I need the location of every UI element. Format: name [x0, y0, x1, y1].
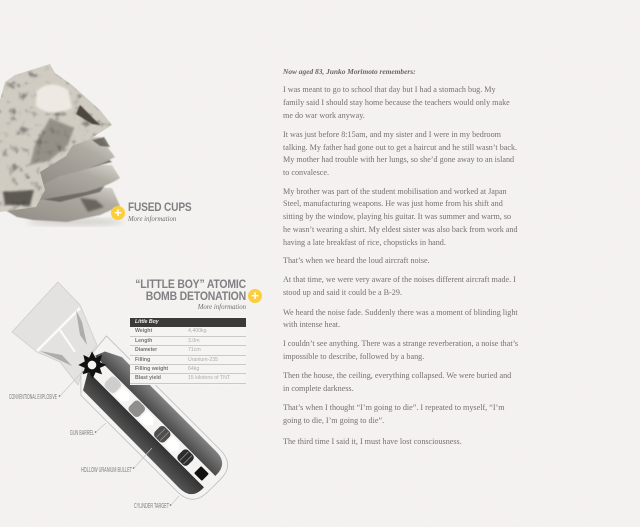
label: hollow uranium bullet: HOLLOW URANIUM BULLET: [81, 467, 132, 474]
text block: testimony: My brother was part of the student mobilisation and worked at Japan: [283, 187, 507, 196]
label: conventional explosive: CONVENTIONAL EXPLOSIVE: [9, 394, 57, 401]
text block: testimony: That’s when we heard the loud aircraft noise.: [283, 256, 430, 265]
text block: testimony: Then the house, the ceiling, everything collapsed. We were buried and: [283, 371, 511, 380]
bomb casing: [64, 336, 235, 507]
text block: testimony: to convalesce.: [283, 168, 329, 177]
table: little boy specifications: [130, 316, 246, 385]
text block: testimony: It was just before 8:15am, and my sister and I were in my bedroom: [283, 130, 501, 139]
table: little boy specifications: Weight: [135, 328, 152, 334]
icon: plus fused cups: +: [114, 205, 122, 220]
photo: fused cups: [0, 64, 121, 227]
text block: testimony: stood up and said it could be a B-29.: [283, 288, 402, 297]
text block: testimony: I couldn’t see anything. There was a strange reverberation, a noise that’s: [283, 339, 518, 348]
link: more information bomb: More information: [198, 304, 246, 311]
text block: testimony: My mother had trouble with her lungs, so she’d gone away to an island: [283, 155, 514, 164]
table: little boy specifications: Filling: [135, 357, 150, 363]
text block: testimony: going to die, I’m going to die”.: [283, 416, 384, 425]
text block: testimony: That’s when I thought “I’m going to die”. I repeated to myself, “I’m: [283, 403, 505, 412]
table: little boy specifications: 3.0m: [188, 338, 200, 344]
label: hollow uranium bullet: [81, 448, 152, 474]
label: gun barrel: [70, 423, 106, 437]
link: more information cups: More information: [128, 216, 176, 223]
text block: testimony: The third time I said it, I must have lost consciousness.: [283, 437, 462, 446]
label: gun barrel: GUN BARREL: [70, 430, 94, 437]
table: little boy specifications: 71cm: [188, 347, 201, 353]
label: conventional explosive: [9, 370, 84, 401]
text block: testimony: Steel, manufacturing weapons. He was just home from his shift and: [283, 199, 503, 208]
tail fin: [12, 282, 97, 385]
table: little boy specifications: Blast yield: [135, 375, 161, 381]
icon: detonation burst: [78, 351, 106, 379]
text block: testimony: in complete darkness.: [283, 384, 354, 393]
text block: testimony: We heard the noise fade. Suddenly there was a moment of blinding light: [283, 308, 518, 317]
text block: testimony: me do war work anyway.: [283, 111, 365, 120]
diagram: little boy bomb: [9, 282, 228, 510]
gun barrel and bullet segments: [86, 358, 215, 487]
text block: testimony: he wasn’t wearing a shirt. My eldest sister was also back from work and: [283, 225, 518, 234]
text block: testimony: having a late breakfast of rice, chopsticks in hand.: [283, 238, 446, 247]
text block: testimony: with intense heat.: [283, 320, 340, 329]
text block: testimony: family said I should stay home because the teachers would only make: [283, 98, 510, 107]
table: little boy specifications: Little Boy: [135, 319, 159, 325]
text block: testimony: impossible to describe, followed by a bang.: [283, 352, 424, 361]
heading: little boy atomic bomb detonation: BOMB DETONATION: [146, 288, 246, 302]
heading: little boy atomic bomb detonation: “LITTLE BOY” ATOMIC: [135, 277, 246, 291]
table: little boy specifications: Diameter: [135, 347, 157, 353]
table: little boy specifications: 15 kilotons of TNT: [188, 375, 230, 381]
heading: fused cups: FUSED CUPS: [128, 202, 191, 214]
text block: testimony: Now aged 83, Junko Morimoto remembers:: [283, 67, 416, 76]
icon: plus little boy: +: [251, 288, 259, 303]
label: cylinder target: CYLINDER TARGET: [134, 503, 169, 510]
text block: testimony: [283, 67, 518, 446]
table: little boy specifications: Filling weight: [135, 366, 168, 372]
heading: little boy atomic bomb detonation: [135, 277, 246, 302]
text block: testimony: At that time, we were very aware of the noises different aircraft made. I: [283, 275, 516, 284]
table: little boy specifications: Length: [135, 338, 152, 344]
text block: testimony: talking. My father had gone out to get a haircut and he still wasn’t back.: [283, 143, 517, 152]
table: little boy specifications: Uranium-235: [188, 357, 218, 363]
text block: testimony: sitting by the window, playing his guitar. It was summer and warm, so: [283, 212, 511, 221]
icon: plus little boy: [248, 289, 262, 303]
icon: plus fused cups: [111, 206, 125, 220]
table: little boy specifications: 4,400kg: [188, 328, 206, 334]
text block: testimony: I was meant to go to school that day but I had a stomach bug. My: [283, 85, 496, 94]
label: cylinder target: [134, 496, 179, 510]
table: little boy specifications: 64kg: [188, 366, 199, 372]
